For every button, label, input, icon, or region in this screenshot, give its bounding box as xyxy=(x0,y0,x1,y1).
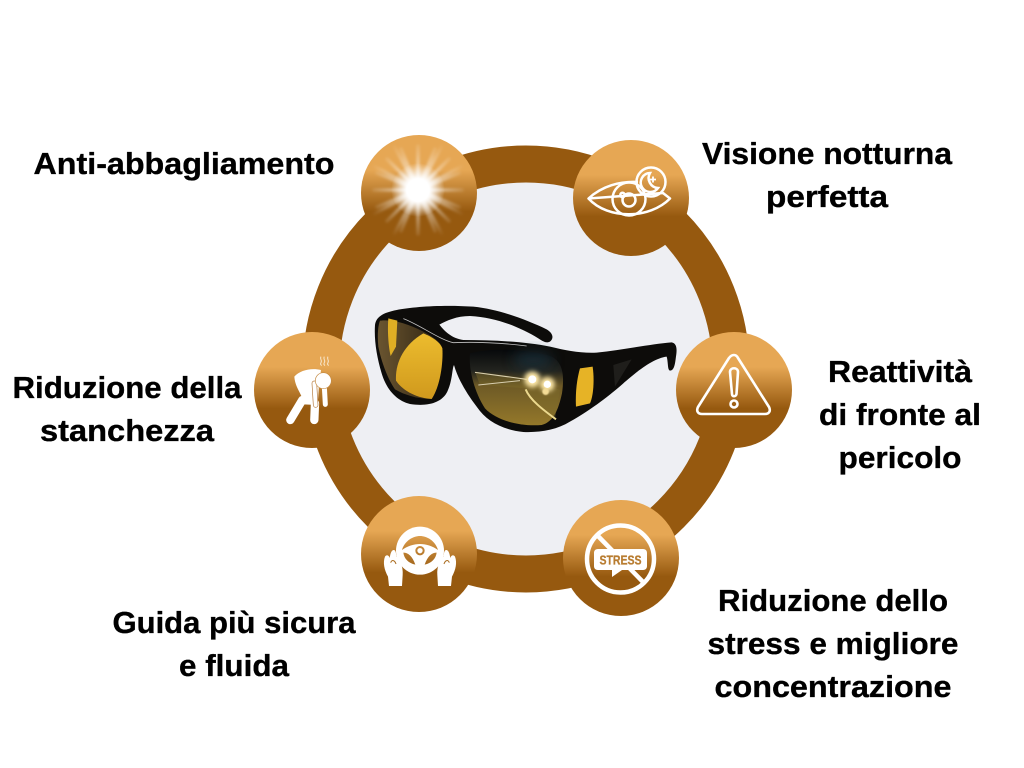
label: stress reduction: concentrazione xyxy=(714,670,952,704)
label: fatigue: Riduzione della xyxy=(12,371,243,405)
node: fatigue xyxy=(254,332,370,448)
label: safer driving xyxy=(112,606,357,683)
node: safer driving xyxy=(361,496,477,612)
label: safer driving: e fluida xyxy=(179,649,290,683)
label: night vision: perfetta xyxy=(766,180,889,214)
icon: warning triangle xyxy=(697,355,770,414)
label: danger reaction: Reattività xyxy=(828,355,973,389)
icon: eye with moon xyxy=(588,168,670,216)
panel: central disc xyxy=(336,179,716,559)
icon: no stress: STRESS xyxy=(600,552,642,568)
label: stress reduction: Riduzione dello xyxy=(718,584,948,618)
label: danger reaction xyxy=(819,355,981,475)
product photo: glasses xyxy=(375,306,677,432)
icon: tired person xyxy=(290,357,331,420)
node: night vision xyxy=(573,140,689,256)
node: anti-glare xyxy=(361,135,477,251)
icon: sweat marks xyxy=(320,357,328,366)
label: stress reduction: stress e migliore xyxy=(708,627,958,661)
label: fatigue: stanchezza xyxy=(40,414,215,448)
node: stress reduction xyxy=(563,500,679,616)
label: danger reaction: di fronte al xyxy=(819,398,981,432)
icon: sun glare xyxy=(370,142,466,238)
icon: steering wheel and hands xyxy=(384,527,456,586)
label: fatigue xyxy=(12,371,243,448)
node: danger reaction xyxy=(676,332,792,448)
label: night vision: Visione notturna xyxy=(702,137,953,171)
ring xyxy=(321,164,731,574)
label: stress reduction xyxy=(708,584,958,704)
label: danger reaction: pericolo xyxy=(838,441,962,475)
label: safer driving: Guida più sicura xyxy=(112,606,357,640)
label: anti-glare: Anti-abbagliamento xyxy=(34,147,334,181)
label: night vision xyxy=(702,137,953,214)
